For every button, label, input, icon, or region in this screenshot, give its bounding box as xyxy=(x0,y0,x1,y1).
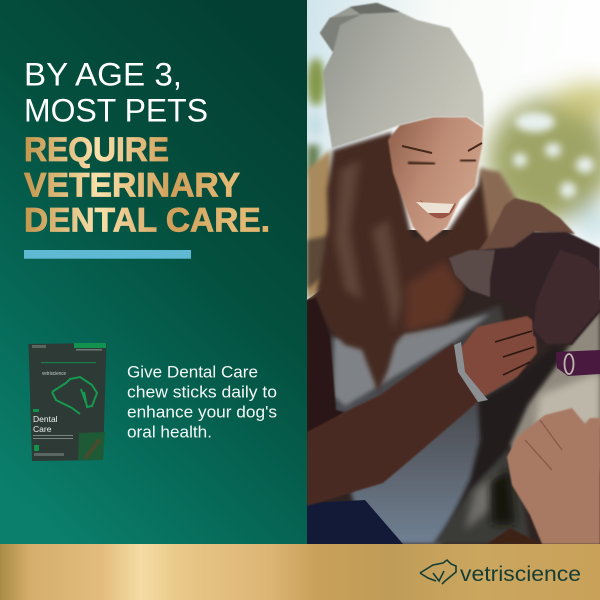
heading: gold emphasis: DENTAL CARE. xyxy=(24,202,270,240)
accent bar xyxy=(24,250,191,259)
woman's hand on dog xyxy=(457,316,537,397)
heading: white lead-in xyxy=(24,57,208,129)
woman's sweater shoulder xyxy=(479,198,576,250)
woman's sleeve xyxy=(307,343,480,506)
woman's hat xyxy=(320,3,484,148)
photo: woman with dog xyxy=(307,0,600,544)
woman's face xyxy=(388,117,483,242)
bag product name xyxy=(33,414,58,434)
heading: gold emphasis: REQUIRE xyxy=(24,131,169,169)
wisps at right of face xyxy=(480,168,520,248)
text block: product message: chew sticks daily to xyxy=(127,384,277,402)
dog's head xyxy=(449,232,600,345)
trees at left edge xyxy=(307,58,325,175)
panel: green message background xyxy=(0,0,307,544)
blurred trees xyxy=(488,84,600,245)
skin of chest xyxy=(406,262,462,332)
bag product name: Care xyxy=(33,424,52,434)
dog's dark shadow body xyxy=(446,346,562,526)
woman's hair xyxy=(315,132,505,392)
shirt upper light area xyxy=(334,314,490,406)
logo wordmark: vetriscience xyxy=(460,563,581,586)
dog's collar xyxy=(556,350,600,376)
shirt xyxy=(328,305,520,544)
sleeve cuff xyxy=(454,342,488,402)
dark base of lower photo xyxy=(307,230,600,544)
heading: white lead-in: BY AGE 3, xyxy=(24,57,182,93)
dog's leg xyxy=(433,447,530,544)
icon: product bag xyxy=(28,343,106,461)
heading: gold emphasis: VETERINARY xyxy=(24,167,240,205)
text block: product message: Give Dental Care xyxy=(127,364,258,382)
hair highlights xyxy=(335,160,362,300)
dog's spotted body xyxy=(508,312,600,472)
icon: dog head logo mark xyxy=(420,560,456,584)
woman's jacket xyxy=(307,298,345,440)
dog's ear xyxy=(533,250,600,344)
bag product name: Dental xyxy=(33,414,58,424)
golden backlit wisps at left xyxy=(307,150,335,300)
sweater hem bottom right xyxy=(487,528,542,544)
heading: gold emphasis xyxy=(24,131,270,240)
bag dog outline xyxy=(52,377,97,414)
bag chew stick panel xyxy=(78,432,105,460)
heading: white lead-in: MOST PETS xyxy=(24,93,208,129)
woman's jeans xyxy=(307,500,403,544)
text block: product message: oral health. xyxy=(127,423,212,441)
text block: product message: enhance your dog's xyxy=(127,404,277,422)
bag brand name: vetriscience xyxy=(42,371,66,377)
person's hand in the foreground xyxy=(507,408,600,544)
bokeh highlights xyxy=(513,112,594,198)
logo: vetriscience xyxy=(420,560,581,586)
gold footer band xyxy=(0,544,600,600)
text block: product message xyxy=(127,364,277,441)
dog's muzzle xyxy=(449,250,495,297)
